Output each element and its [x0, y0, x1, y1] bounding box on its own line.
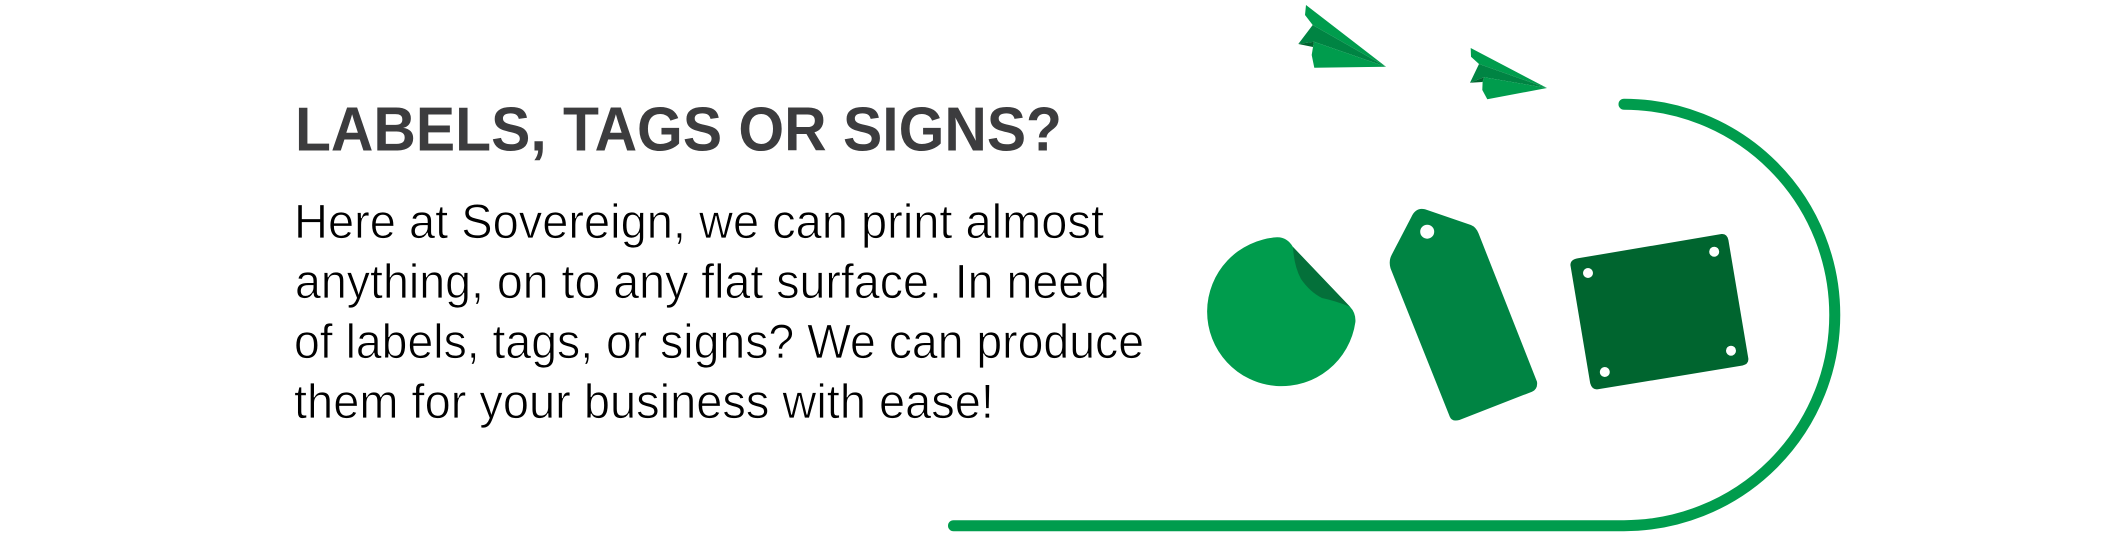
title: LABELS, TAGS OR SIGNS? — [295, 96, 1062, 164]
body text: them for your business with ease! — [294, 376, 994, 429]
curved flight path line — [954, 104, 1835, 526]
icon: hanging tag — [1390, 209, 1537, 421]
body text: of labels, tags, or signs? We can produce — [294, 316, 1144, 369]
icon: peeling round sticker — [1207, 237, 1355, 386]
body text: Here at Sovereign, we can print almost — [294, 196, 1104, 249]
icon: paper plane small — [1470, 48, 1547, 99]
body text: anything, on to any flat surface. In need — [295, 256, 1110, 309]
icon: paper plane large — [1298, 5, 1386, 68]
icon: rectangular sign plate — [1570, 234, 1748, 389]
body text — [294, 196, 1144, 429]
